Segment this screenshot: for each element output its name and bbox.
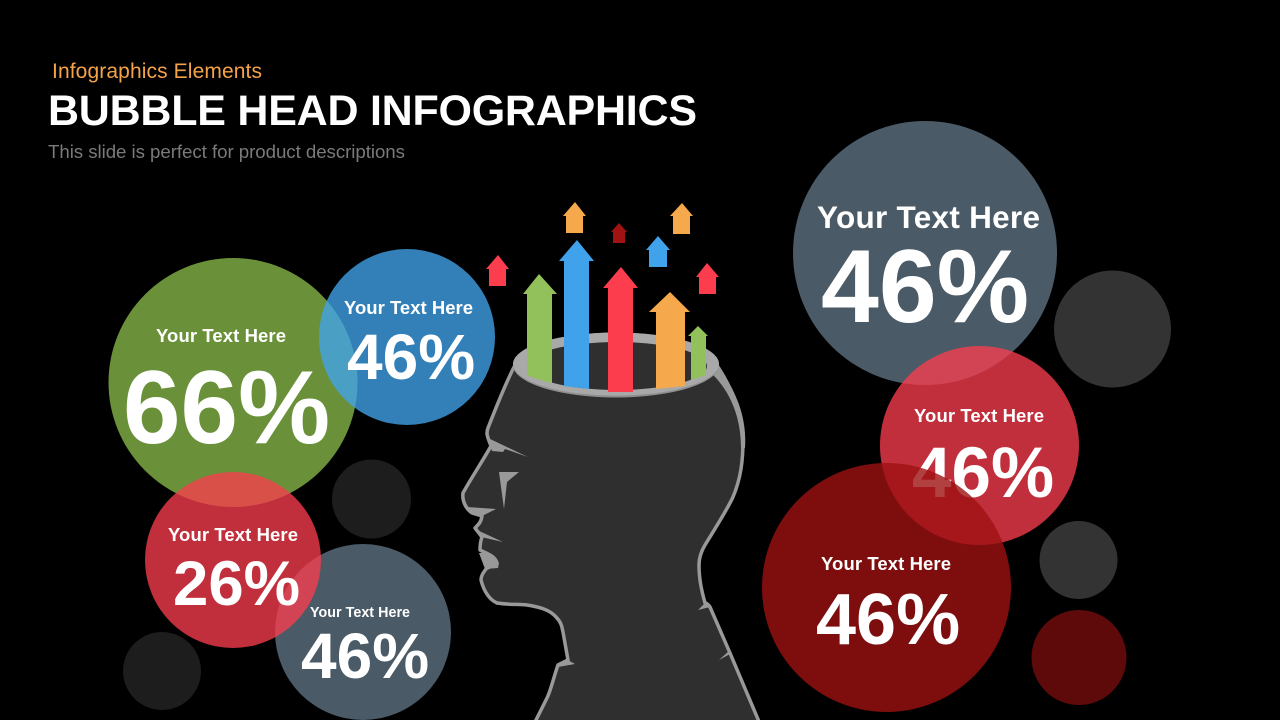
bubble: red 46%: [880, 346, 1079, 545]
small arrow: red right: [696, 263, 719, 294]
head rim highlight: [513, 332, 719, 396]
bubble: red 26%: [145, 472, 321, 648]
bubble: green 66%: [108, 258, 358, 507]
small arrow: orange left: [563, 202, 586, 233]
bubble: slate 46% small: [275, 544, 451, 720]
bubble: green 66%: Your Text Here: [156, 325, 286, 346]
bubble: slate 46% large: Your Text Here: [817, 199, 1040, 235]
small arrow: blue: [646, 236, 670, 267]
bubble: blue 46%: Your Text Here: [344, 297, 473, 318]
arrow: blue: [559, 240, 594, 389]
arrow: red: [603, 267, 638, 392]
arrow: small green: [688, 326, 708, 380]
face detail strokes: [467, 364, 745, 667]
subtitle: Infographics Elements: Infographics Elements: [52, 60, 262, 83]
bubble: green 66%: 66%: [123, 349, 330, 465]
bubble: red 46%: 46%: [912, 434, 1054, 513]
bubble: dark red 46%: 46%: [816, 580, 960, 660]
small arrow: dark red: [611, 223, 627, 243]
bubble: blue 46%: [319, 249, 495, 425]
head rim: [513, 332, 719, 398]
bubble: dark red 46%: [762, 463, 1011, 712]
decorative dark bubbles: [123, 270, 1171, 710]
arrow: green: [523, 274, 557, 383]
head opening: [527, 342, 707, 390]
bubble: blue 46%: 46%: [347, 321, 475, 393]
bubble: dark red 46%: Your Text Here: [821, 553, 951, 574]
bubble: red 26%: 26%: [173, 549, 300, 619]
head silhouette: [463, 367, 760, 720]
bubble: slate 46% small: 46%: [301, 620, 429, 692]
bubble: slate 46% large: [793, 121, 1057, 385]
bubble: slate 46% small: Your Text Here: [310, 605, 410, 621]
small arrow: red left: [486, 255, 509, 286]
bubble: slate 46% large: 46%: [821, 229, 1029, 345]
bubble: red 46%: Your Text Here: [914, 405, 1044, 426]
small arrow: orange right: [670, 203, 693, 234]
bubble: red 26%: Your Text Here: [168, 524, 298, 545]
rising arrows from head: [486, 202, 719, 392]
title: BUBBLE HEAD INFOGRAPHICS: [48, 87, 697, 135]
head illustration: [463, 332, 760, 720]
description text: This slide is perfect for product descriptions: [48, 141, 405, 162]
arrow: orange: [649, 292, 690, 389]
